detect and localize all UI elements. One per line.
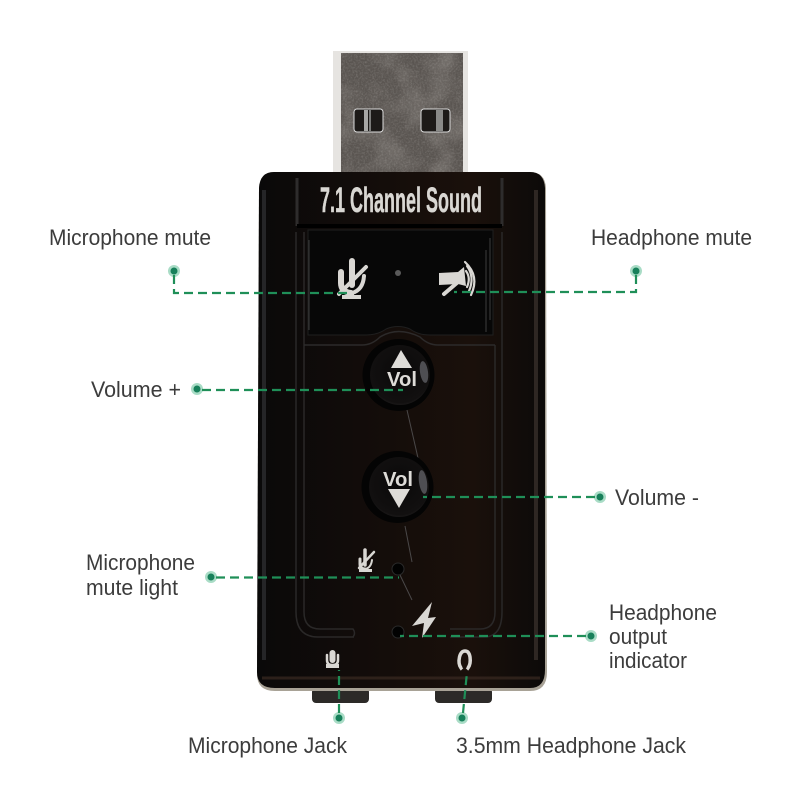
indicator dot bbox=[395, 270, 401, 276]
button: volume down: Vol bbox=[383, 469, 413, 491]
label: Headphone output indicator: indicator bbox=[609, 648, 687, 673]
label: Microphone mute light: Microphone bbox=[86, 550, 195, 575]
callout: Volume - bbox=[423, 491, 606, 503]
printed heading: 7.1 Channel Sound: 7.1 Channel Sound bbox=[320, 181, 482, 220]
icon: headphone mute bbox=[439, 262, 474, 295]
label: Microphone mute: Microphone mute bbox=[49, 225, 211, 250]
callout: Volume + bbox=[191, 383, 403, 395]
headphone output light bbox=[392, 626, 404, 638]
callout: Microphone Jack bbox=[333, 670, 345, 724]
icon: headphone jack bbox=[459, 651, 470, 668]
button: volume up: Vol bbox=[387, 369, 417, 391]
button: volume down bbox=[362, 451, 434, 523]
label: 3.5mm Headphone Jack: 3.5mm Headphone Jack bbox=[456, 733, 687, 758]
callout: Microphone mute bbox=[168, 265, 348, 293]
headphone jack socket bbox=[435, 688, 492, 703]
icon: microphone mute bbox=[339, 261, 366, 299]
button: volume up bbox=[362, 339, 434, 411]
callout: 3.5mm Headphone Jack bbox=[456, 672, 468, 724]
callout: Headphone mute bbox=[454, 265, 642, 292]
label: Volume +: Volume + bbox=[91, 377, 181, 402]
label: Microphone Jack: Microphone Jack bbox=[188, 733, 348, 758]
icon: small microphone mute bbox=[359, 550, 374, 572]
label: Headphone mute: Headphone mute bbox=[591, 225, 752, 250]
icon: microphone jack bbox=[326, 653, 339, 668]
microphone jack socket bbox=[312, 688, 369, 703]
callout: Headphone output indicator bbox=[400, 630, 597, 642]
USB plug bbox=[333, 51, 468, 173]
device body bbox=[257, 172, 547, 691]
label: Headphone output indicator: Headphone bbox=[609, 600, 717, 625]
icon: lightning bolt bbox=[412, 602, 436, 638]
label: Headphone output indicator: output bbox=[609, 624, 667, 649]
callout: Microphone mute light bbox=[205, 571, 399, 583]
label: Volume -: Volume - bbox=[615, 485, 699, 510]
microphone mute light bbox=[392, 563, 404, 575]
label: Microphone mute light: mute light bbox=[86, 575, 178, 600]
